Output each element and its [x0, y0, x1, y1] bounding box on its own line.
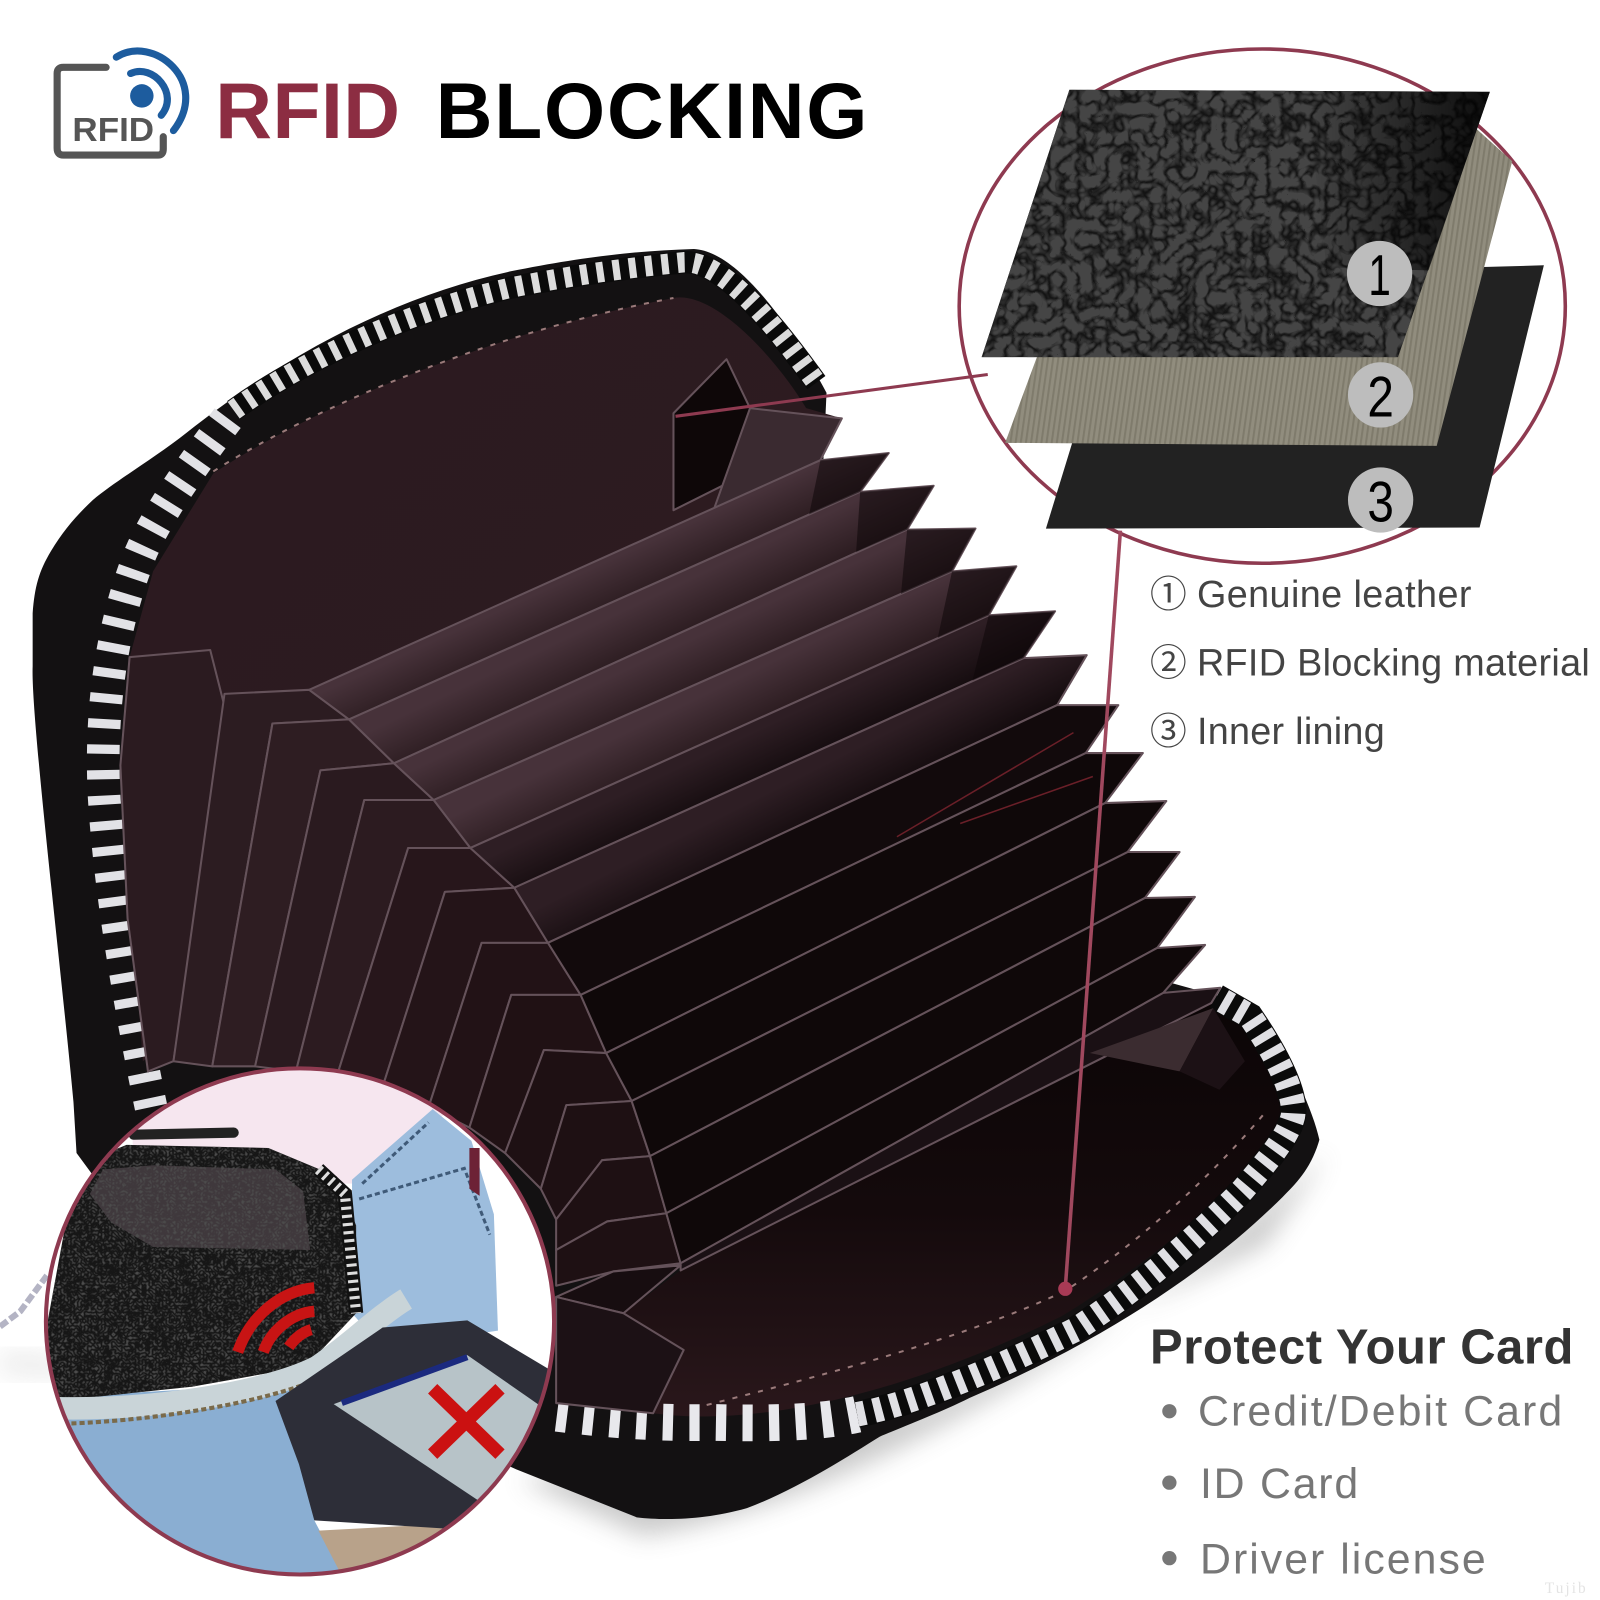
bottom zipper	[557, 997, 1293, 1423]
layer 3: inner lining	[1046, 265, 1544, 529]
lower jeans	[68, 1390, 338, 1572]
material legend	[1150, 573, 1590, 752]
material layers	[982, 90, 1544, 534]
chain	[0, 1276, 47, 1327]
item: credit/debit card: Credit/Debit Card	[1198, 1388, 1562, 1436]
badge 3	[1348, 467, 1413, 534]
red lining strip	[469, 1148, 480, 1196]
accordion card slots	[120, 359, 1220, 1413]
open wallet	[33, 249, 1319, 1519]
watermark: Tujib	[1545, 1580, 1588, 1597]
pink backdrop	[132, 1070, 444, 1184]
legend item 2: RFID Blocking material	[1197, 642, 1590, 684]
layer 1: genuine leather	[982, 90, 1490, 357]
legend item 1: ①	[1150, 574, 1187, 615]
icon: RFID card with waves	[57, 51, 186, 155]
legend item 3: ③	[1150, 711, 1187, 752]
badge 2	[1348, 362, 1413, 429]
callout line to lining	[676, 374, 988, 416]
small wallet	[46, 1133, 356, 1401]
top zipper	[103, 262, 816, 1107]
first pleat tab	[714, 408, 842, 508]
red threads	[897, 733, 1093, 837]
jeans pocket hem	[56, 1299, 406, 1423]
card reader	[276, 1320, 571, 1531]
layer 2: RFID blocking material	[1005, 122, 1512, 446]
badge 1: 1	[1368, 244, 1391, 308]
title: RFID	[215, 67, 400, 155]
title	[215, 67, 867, 155]
badge 2: 2	[1367, 365, 1394, 429]
pocket dark strip	[673, 359, 750, 510]
legend item 3: Inner lining	[1197, 710, 1385, 752]
callout line to wallet floor	[1058, 531, 1120, 1296]
small pocket tab	[1090, 1008, 1245, 1090]
shadow by circle	[0, 1352, 71, 1378]
wallet leather shell	[33, 249, 1319, 1519]
bottom interior floor	[623, 1003, 1288, 1416]
inset circle: wallet in jeans pocket blocked from reader	[31, 1061, 571, 1592]
item: driver license: Driver license	[1200, 1535, 1486, 1583]
header: RFID blocking	[57, 51, 867, 155]
item: id card: ID Card	[1200, 1460, 1358, 1508]
badge 3: 3	[1367, 470, 1394, 534]
darker pleat tips	[809, 453, 1055, 681]
wallet shadow	[520, 1153, 1327, 1536]
list heading: Protect Your Card	[1150, 1320, 1573, 1374]
callout ellipse	[959, 49, 1565, 563]
icon: red RFID waves	[238, 1288, 314, 1352]
protect your card list	[1150, 1320, 1573, 1583]
icon: red cross	[433, 1389, 500, 1454]
legend item 1: Genuine leather	[1197, 573, 1471, 615]
title: BLOCKING	[436, 67, 867, 155]
jeans upper	[352, 1109, 498, 1348]
legend item 2: ②	[1150, 643, 1187, 684]
back lining panel	[120, 297, 842, 1061]
badge 1	[1347, 241, 1412, 308]
hand	[318, 1526, 443, 1570]
icon: RFID card with waves: RFID	[72, 112, 154, 149]
